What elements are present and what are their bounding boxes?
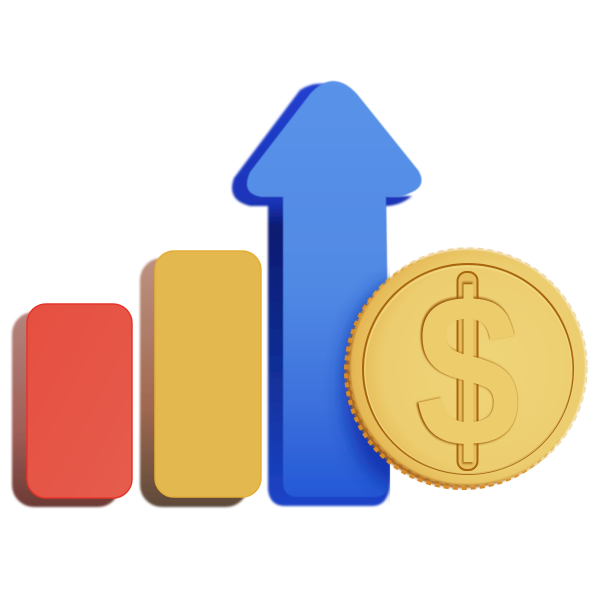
coin face [350, 249, 586, 485]
illustration: bars, arrow and coin [10, 80, 588, 509]
arrow: up [230, 80, 422, 508]
red bar side [12, 312, 120, 507]
arrow side [232, 84, 412, 506]
yellow bar face [155, 251, 261, 497]
coin [346, 246, 587, 494]
coin inner ring highlight [365, 266, 572, 474]
arrow face [247, 81, 422, 497]
coin ridges [346, 254, 580, 488]
dollar sign group [414, 246, 520, 494]
dollar bar [458, 272, 478, 470]
bar: red [12, 304, 132, 507]
bar: yellow [140, 251, 261, 507]
dollar face: $ [416, 250, 520, 493]
coin inner ring shadow [363, 264, 573, 474]
red bar face [27, 304, 132, 498]
coin edge [346, 254, 580, 488]
dollar shadow: $ [414, 246, 520, 494]
coin outer ridges [349, 248, 587, 486]
coin shadow on arrow [334, 268, 390, 502]
yellow bar side [140, 258, 248, 507]
